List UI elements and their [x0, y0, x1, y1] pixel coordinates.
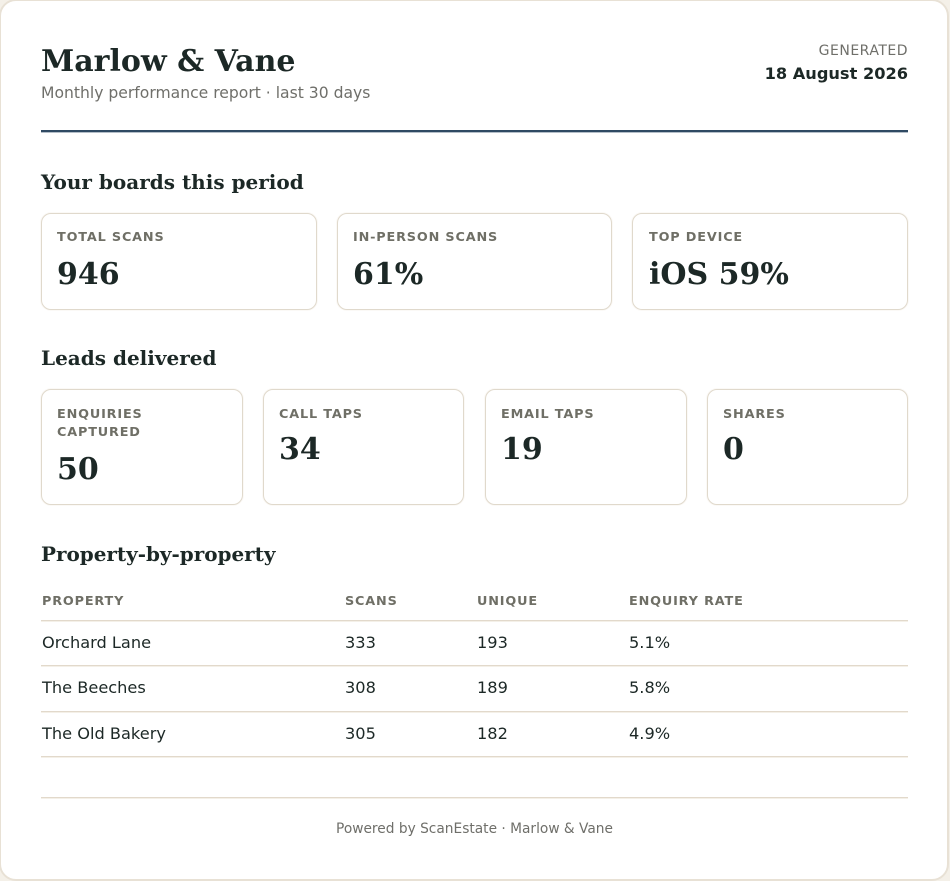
stat: enquiries captured: ENQUIRIES [57, 407, 143, 422]
stat: call taps: CALL TAPS [279, 407, 363, 422]
stat: email taps [485, 389, 687, 505]
stat: top device [632, 213, 908, 310]
column header: unique: UNIQUE [477, 594, 538, 609]
row: The Beeches: 189 [477, 678, 508, 697]
row: The Old Bakery [42, 724, 670, 743]
row: The Beeches: 5.8% [629, 678, 670, 697]
row: Orchard Lane [42, 633, 670, 652]
row: The Old Bakery: The Old Bakery [42, 724, 166, 743]
column header: scans: SCANS [345, 594, 398, 609]
stat: in-person scans: IN-PERSON SCANS [353, 230, 498, 245]
generated label: GENERATED [819, 43, 908, 59]
stat: shares [707, 389, 908, 505]
heading: leads: Leads delivered [41, 346, 216, 370]
header rule [41, 130, 908, 132]
stat: email taps: 19 [501, 432, 543, 467]
subtitle: Monthly performance report · last 30 days [41, 84, 370, 102]
stat: total scans: 946 [57, 257, 120, 292]
property table [41, 594, 908, 758]
row: The Old Bakery: 182 [477, 724, 508, 743]
row: The Beeches [42, 678, 670, 697]
column header: enquiry rate: ENQUIRY RATE [629, 594, 744, 609]
row: Orchard Lane: Orchard Lane [42, 633, 151, 652]
stat: enquiries captured: 50 [57, 452, 99, 487]
row: The Old Bakery: 4.9% [629, 724, 670, 743]
generated date: 18 August 2026 [765, 64, 908, 83]
row: The Beeches: 308 [345, 678, 376, 697]
column header: property: PROPERTY [42, 594, 124, 609]
stat: shares: 0 [723, 432, 744, 467]
heading: boards: Your boards this period [41, 170, 304, 194]
row: Orchard Lane: 193 [477, 633, 508, 652]
footer: Powered by ScanEstate · Marlow & Vane [336, 821, 613, 837]
stat: shares: SHARES [723, 407, 786, 422]
row: The Beeches: The Beeches [42, 678, 146, 697]
title: Marlow & Vane [41, 44, 296, 79]
stat: in-person scans [337, 213, 612, 310]
stat: call taps [263, 389, 464, 505]
stat: call taps: 34 [279, 432, 321, 467]
row: Orchard Lane: 333 [345, 633, 376, 652]
stat: enquiries captured: CAPTURED [57, 425, 141, 440]
stat: enquiries captured [41, 389, 243, 505]
stat: total scans [41, 213, 317, 310]
stat: top device: TOP DEVICE [649, 230, 743, 245]
row: Orchard Lane: 5.1% [629, 633, 670, 652]
stat: top device: iOS 59% [649, 257, 789, 292]
stat: total scans: TOTAL SCANS [57, 230, 165, 245]
heading: property: Property-by-property [41, 542, 275, 566]
stat: in-person scans: 61% [353, 257, 423, 292]
stat: email taps: EMAIL TAPS [501, 407, 594, 422]
row: The Old Bakery: 305 [345, 724, 376, 743]
